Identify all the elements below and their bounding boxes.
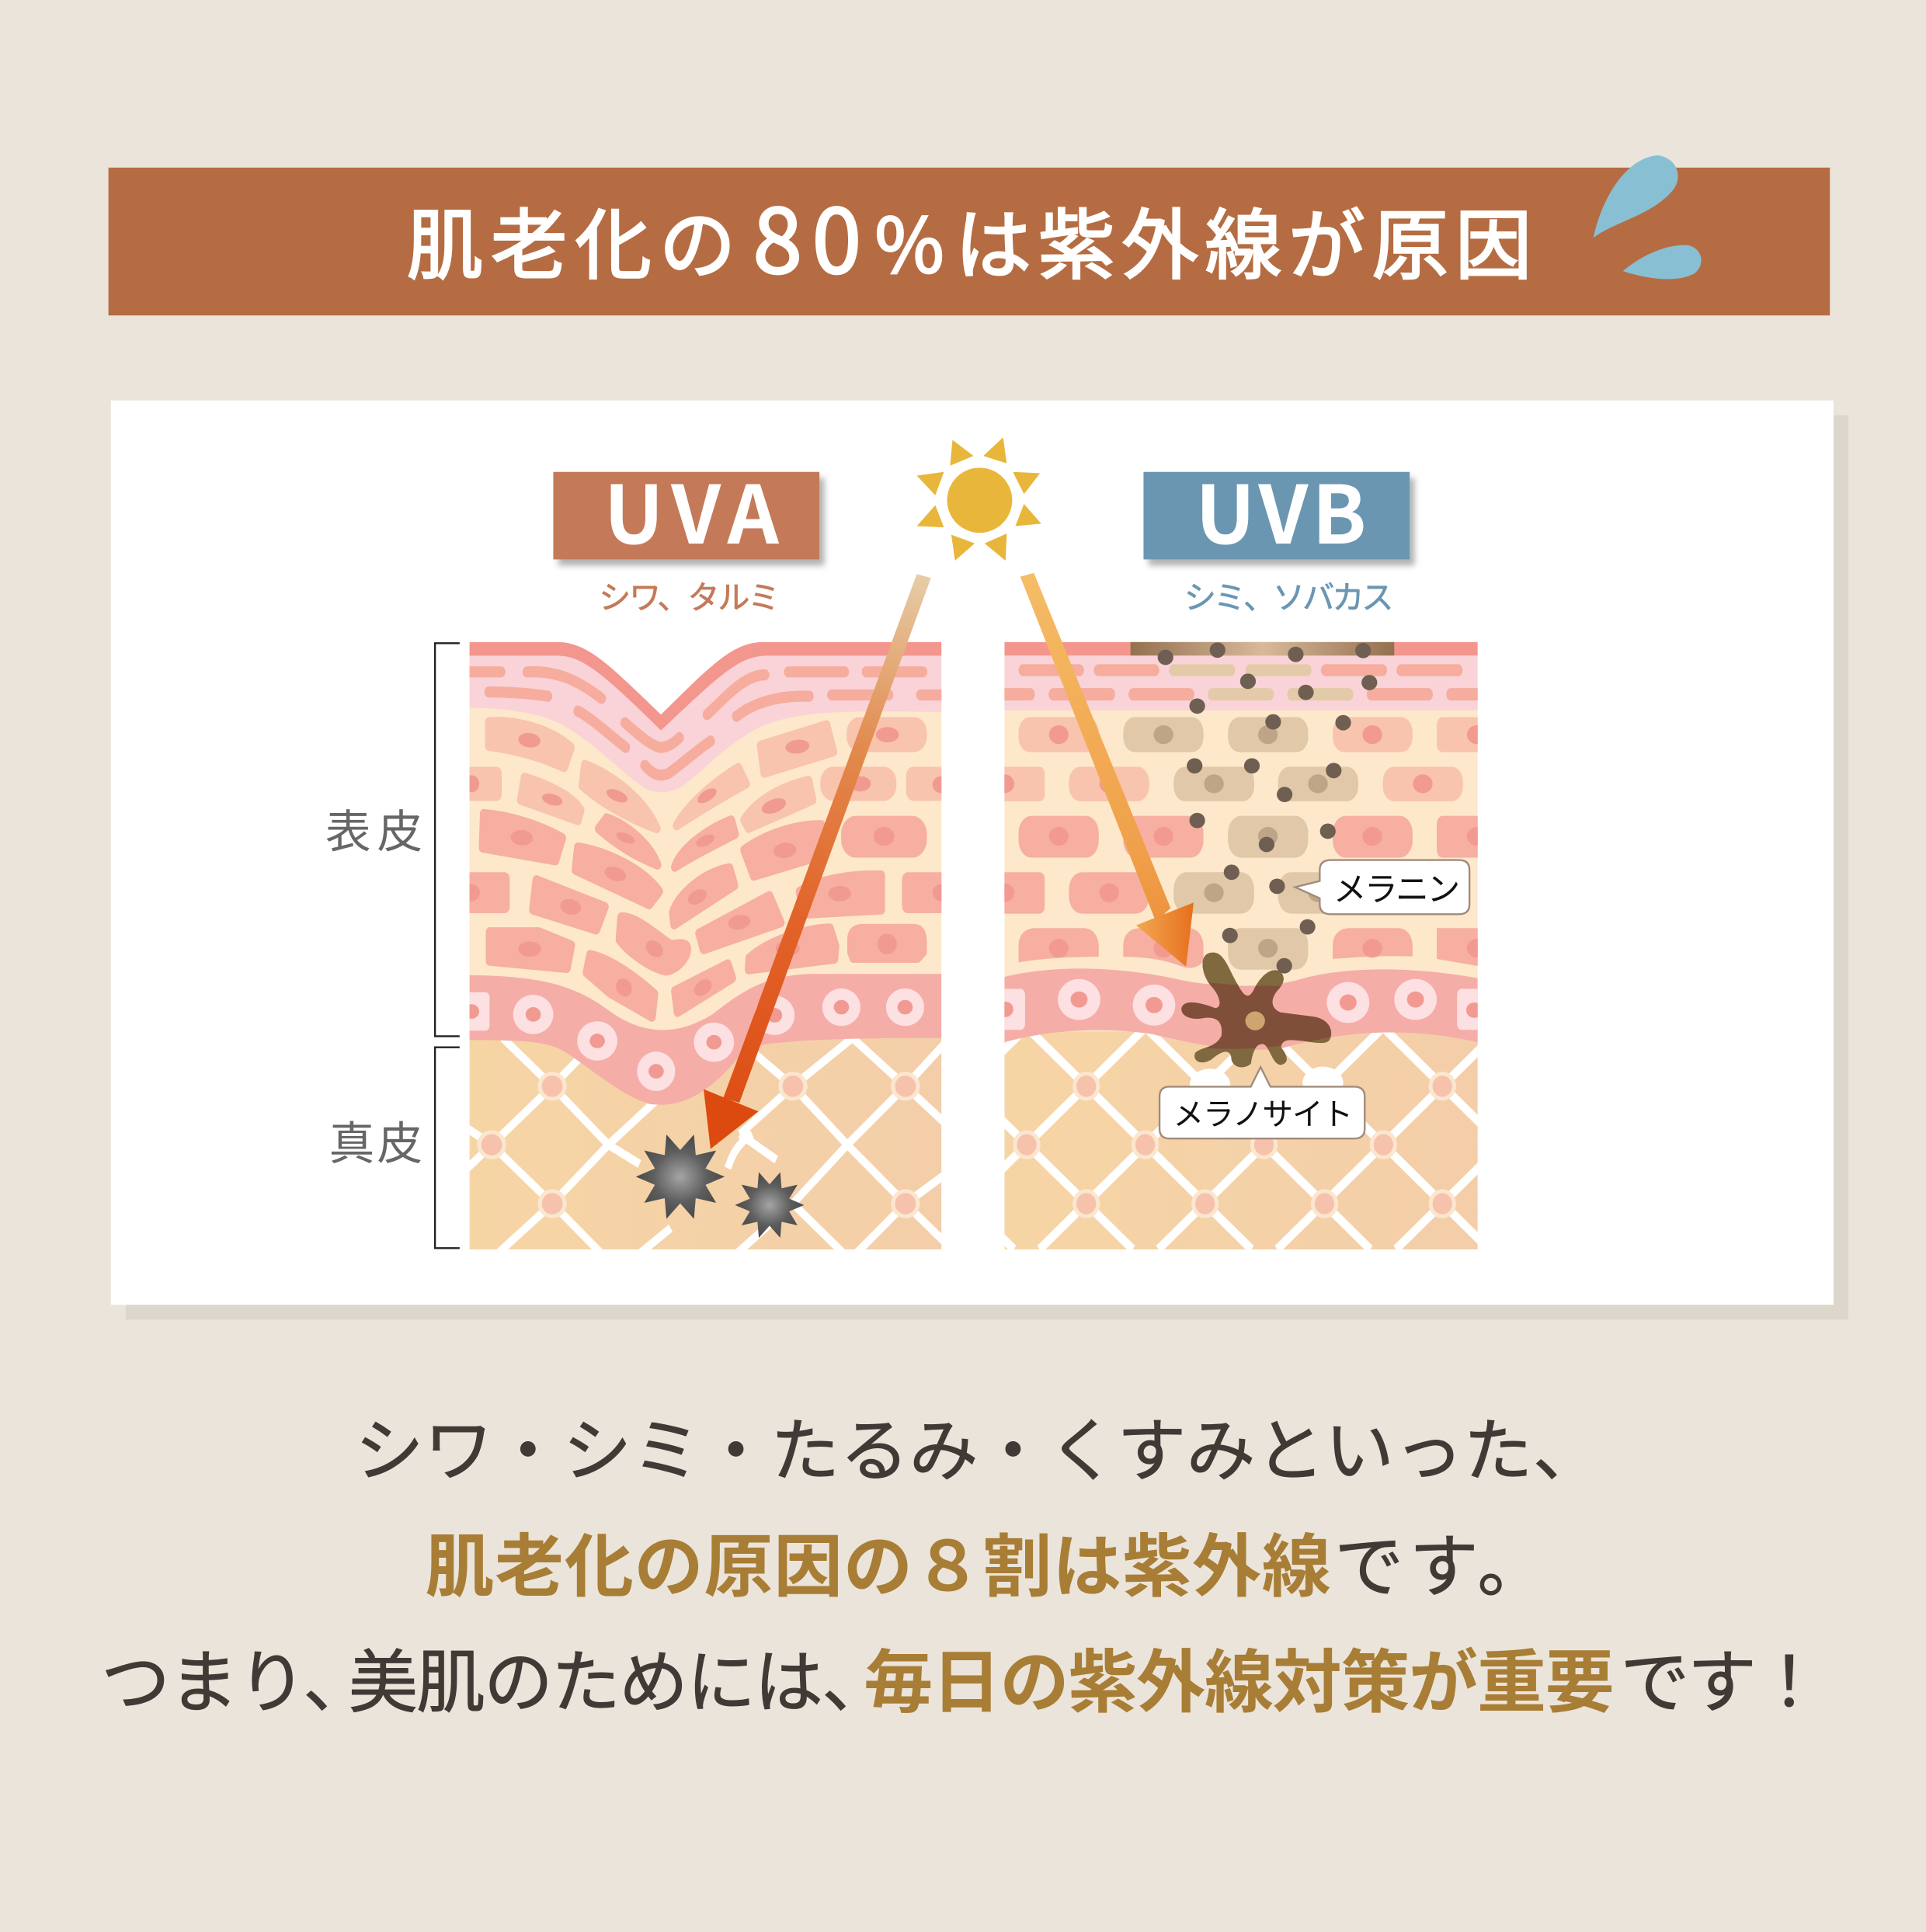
bracket: dermis — [435, 1048, 460, 1248]
skin diagram: wrinkled skin (UVA) — [456, 642, 951, 1253]
callout: melanin: メラニン — [1333, 863, 1460, 911]
UVB label — [1143, 450, 1410, 567]
text line 3: つまり、 — [101, 1627, 372, 1727]
arrow: UVB — [1020, 573, 1194, 967]
bracket: epidermis — [435, 643, 460, 1036]
label: dermis: 真皮 — [329, 1107, 422, 1173]
text line 2: 肌老化の原因の８割は紫外線 — [425, 1510, 1331, 1611]
UVB label: UVB — [1195, 450, 1367, 567]
callout: melanocyte: メラノサイト — [1173, 1090, 1353, 1135]
title — [407, 169, 1531, 298]
label: epidermis: 表皮 — [325, 795, 422, 861]
text line 3: です！ — [1621, 1627, 1823, 1727]
text line 2: です。 — [1334, 1510, 1546, 1611]
icon: water drops — [1594, 155, 1702, 279]
title: % — [875, 186, 944, 294]
UVA label: UVA — [603, 450, 780, 567]
UVA label — [553, 450, 819, 567]
UVB effects text: シミ、ソバカス — [1184, 572, 1394, 618]
arrow: UVA — [704, 574, 931, 1149]
skin diagram: melanin skin (UVB) — [1004, 641, 1478, 1249]
text line 3: 美肌のためには、 — [349, 1627, 891, 1727]
title banner — [109, 155, 1830, 315]
star: collagen damage small — [735, 1173, 804, 1238]
melanin granules — [1158, 642, 1377, 974]
title: は紫外線が原因 — [955, 185, 1531, 295]
melanocyte — [1181, 952, 1331, 1067]
infographic — [106, 155, 1848, 1713]
text block: summary — [101, 1395, 1823, 1727]
text line 3: 毎日の紫外線対策が重要 — [864, 1627, 1615, 1727]
UVA effects text: シワ、タルミ — [599, 572, 780, 618]
star: collagen damage large — [636, 1135, 725, 1219]
icon: sun — [916, 437, 1041, 561]
text line 3 — [101, 1627, 1823, 1727]
title: 80 — [753, 169, 861, 298]
callout: melanocyte — [1159, 1067, 1365, 1138]
title: 肌老化の — [407, 185, 735, 295]
text line 1: シワ・シミ・たるみ・くすみといった、 — [355, 1395, 1602, 1495]
panel: diagram card — [111, 401, 1848, 1319]
callout: melanin — [1295, 860, 1469, 914]
